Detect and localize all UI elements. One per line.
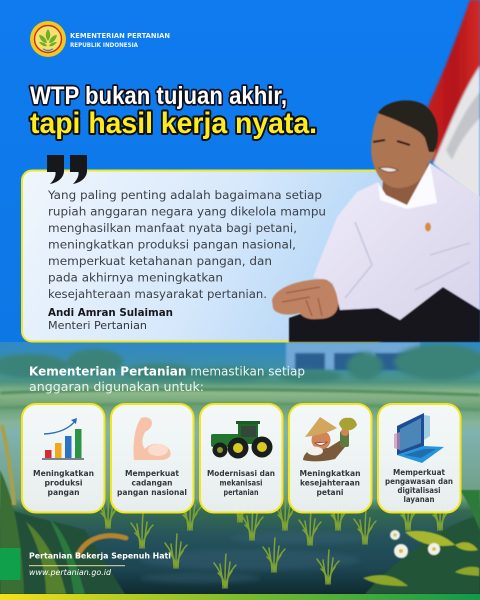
eyes and brows bbox=[373, 140, 410, 145]
footer tagline: Pertanian Bekerja Sepenuh Hati bbox=[29, 550, 171, 560]
quote text: rupiah anggaran negara yang dikelola mampu bbox=[48, 206, 326, 218]
card label: Memperkuat bbox=[125, 469, 179, 478]
shirt bbox=[313, 163, 480, 320]
footer url: www.pertanian.go.id bbox=[29, 568, 112, 577]
hands bbox=[272, 279, 338, 319]
title bbox=[30, 82, 317, 140]
speaker role: Menteri Pertanian bbox=[48, 320, 147, 332]
footer green tab bbox=[0, 548, 20, 580]
card label: produksi bbox=[44, 478, 83, 488]
blue sky background bbox=[0, 0, 480, 345]
quote text: pada akhirnya meningkatkan bbox=[48, 272, 223, 284]
ministry name: KEMENTERIAN PERTANIAN bbox=[70, 31, 170, 40]
smile bbox=[379, 167, 398, 172]
card: food reserves bbox=[111, 404, 194, 512]
quote text bbox=[47, 189, 326, 301]
card label: mekanisasi bbox=[220, 478, 263, 488]
rice field scene bbox=[0, 342, 480, 594]
left foliage bbox=[0, 425, 126, 594]
water reflections bbox=[140, 532, 370, 583]
indonesian flag bbox=[428, 0, 480, 200]
bottom gradient strip bbox=[0, 594, 480, 600]
quote text: menghasilkan manfaat nyata bagi petani, bbox=[48, 222, 297, 235]
tree line bbox=[0, 344, 480, 382]
quote text: Yang paling penting adalah bagaimana setiap bbox=[47, 189, 322, 202]
quote panel bbox=[22, 155, 387, 342]
icon: bar chart bbox=[42, 418, 84, 460]
lapel pin bbox=[425, 222, 431, 232]
minister portrait bbox=[272, 100, 480, 342]
face bbox=[371, 113, 436, 188]
quote text: meningkatkan produksi pangan nasional, bbox=[48, 238, 296, 252]
card label: Modernisasi dan bbox=[207, 469, 275, 478]
distant building bbox=[286, 342, 420, 370]
card label bbox=[300, 469, 360, 497]
trousers bbox=[289, 287, 480, 342]
quotation mark icon bbox=[47, 155, 87, 184]
quote text: memperkuat ketahanan pangan, dan bbox=[48, 255, 272, 268]
hair bbox=[378, 100, 438, 152]
collar bbox=[378, 163, 437, 209]
card label: pertanian bbox=[224, 488, 258, 497]
icon: laptop bbox=[394, 413, 444, 463]
card label: cadangan bbox=[132, 478, 172, 488]
icon: flexed arm bbox=[134, 417, 171, 460]
footer url bbox=[29, 565, 125, 577]
card label: pangan bbox=[48, 488, 80, 497]
ministry name: REPUBLIK INDONESIA bbox=[70, 42, 138, 49]
card: farmer welfare bbox=[289, 404, 372, 512]
card label: Meningkatkan bbox=[300, 469, 360, 478]
card label: layanan bbox=[404, 495, 434, 504]
icon: tractor bbox=[211, 421, 272, 458]
card label: Memperkuat bbox=[393, 468, 445, 477]
bottom rice plants bbox=[97, 488, 451, 588]
section heading: anggaran digunakan untuk: bbox=[29, 380, 204, 394]
card label: kesejahteraan bbox=[300, 478, 360, 488]
ministry name bbox=[70, 31, 170, 49]
title: tapi hasil kerja nyata. bbox=[30, 107, 317, 140]
neck bbox=[382, 160, 431, 209]
card label: petani bbox=[316, 488, 344, 497]
card label: Meningkatkan bbox=[33, 469, 94, 478]
right foliage and flowers bbox=[363, 490, 480, 594]
card label bbox=[117, 469, 187, 497]
card label: pengawasan dan bbox=[385, 477, 453, 486]
terraces bbox=[0, 389, 480, 410]
card label: pangan nasional bbox=[117, 488, 187, 497]
ministry logo bbox=[30, 21, 66, 57]
card label bbox=[33, 469, 94, 497]
section heading: Kementerian Pertanian memastikan setiap bbox=[29, 364, 305, 378]
icon: farmer with rice bbox=[303, 417, 357, 461]
card: mechanization bbox=[200, 404, 282, 512]
speaker name: Andi Amran Sulaiman bbox=[48, 307, 173, 319]
card label bbox=[385, 468, 453, 504]
card: digital services bbox=[378, 404, 460, 512]
card label: digitalisasi bbox=[398, 486, 441, 495]
card: production bbox=[22, 404, 104, 512]
card label bbox=[207, 469, 275, 497]
title: WTP bukan tujuan akhir, bbox=[30, 82, 287, 110]
section heading bbox=[29, 364, 305, 394]
quote text: kesejahteraan masyarakat pertanian. bbox=[48, 288, 267, 301]
